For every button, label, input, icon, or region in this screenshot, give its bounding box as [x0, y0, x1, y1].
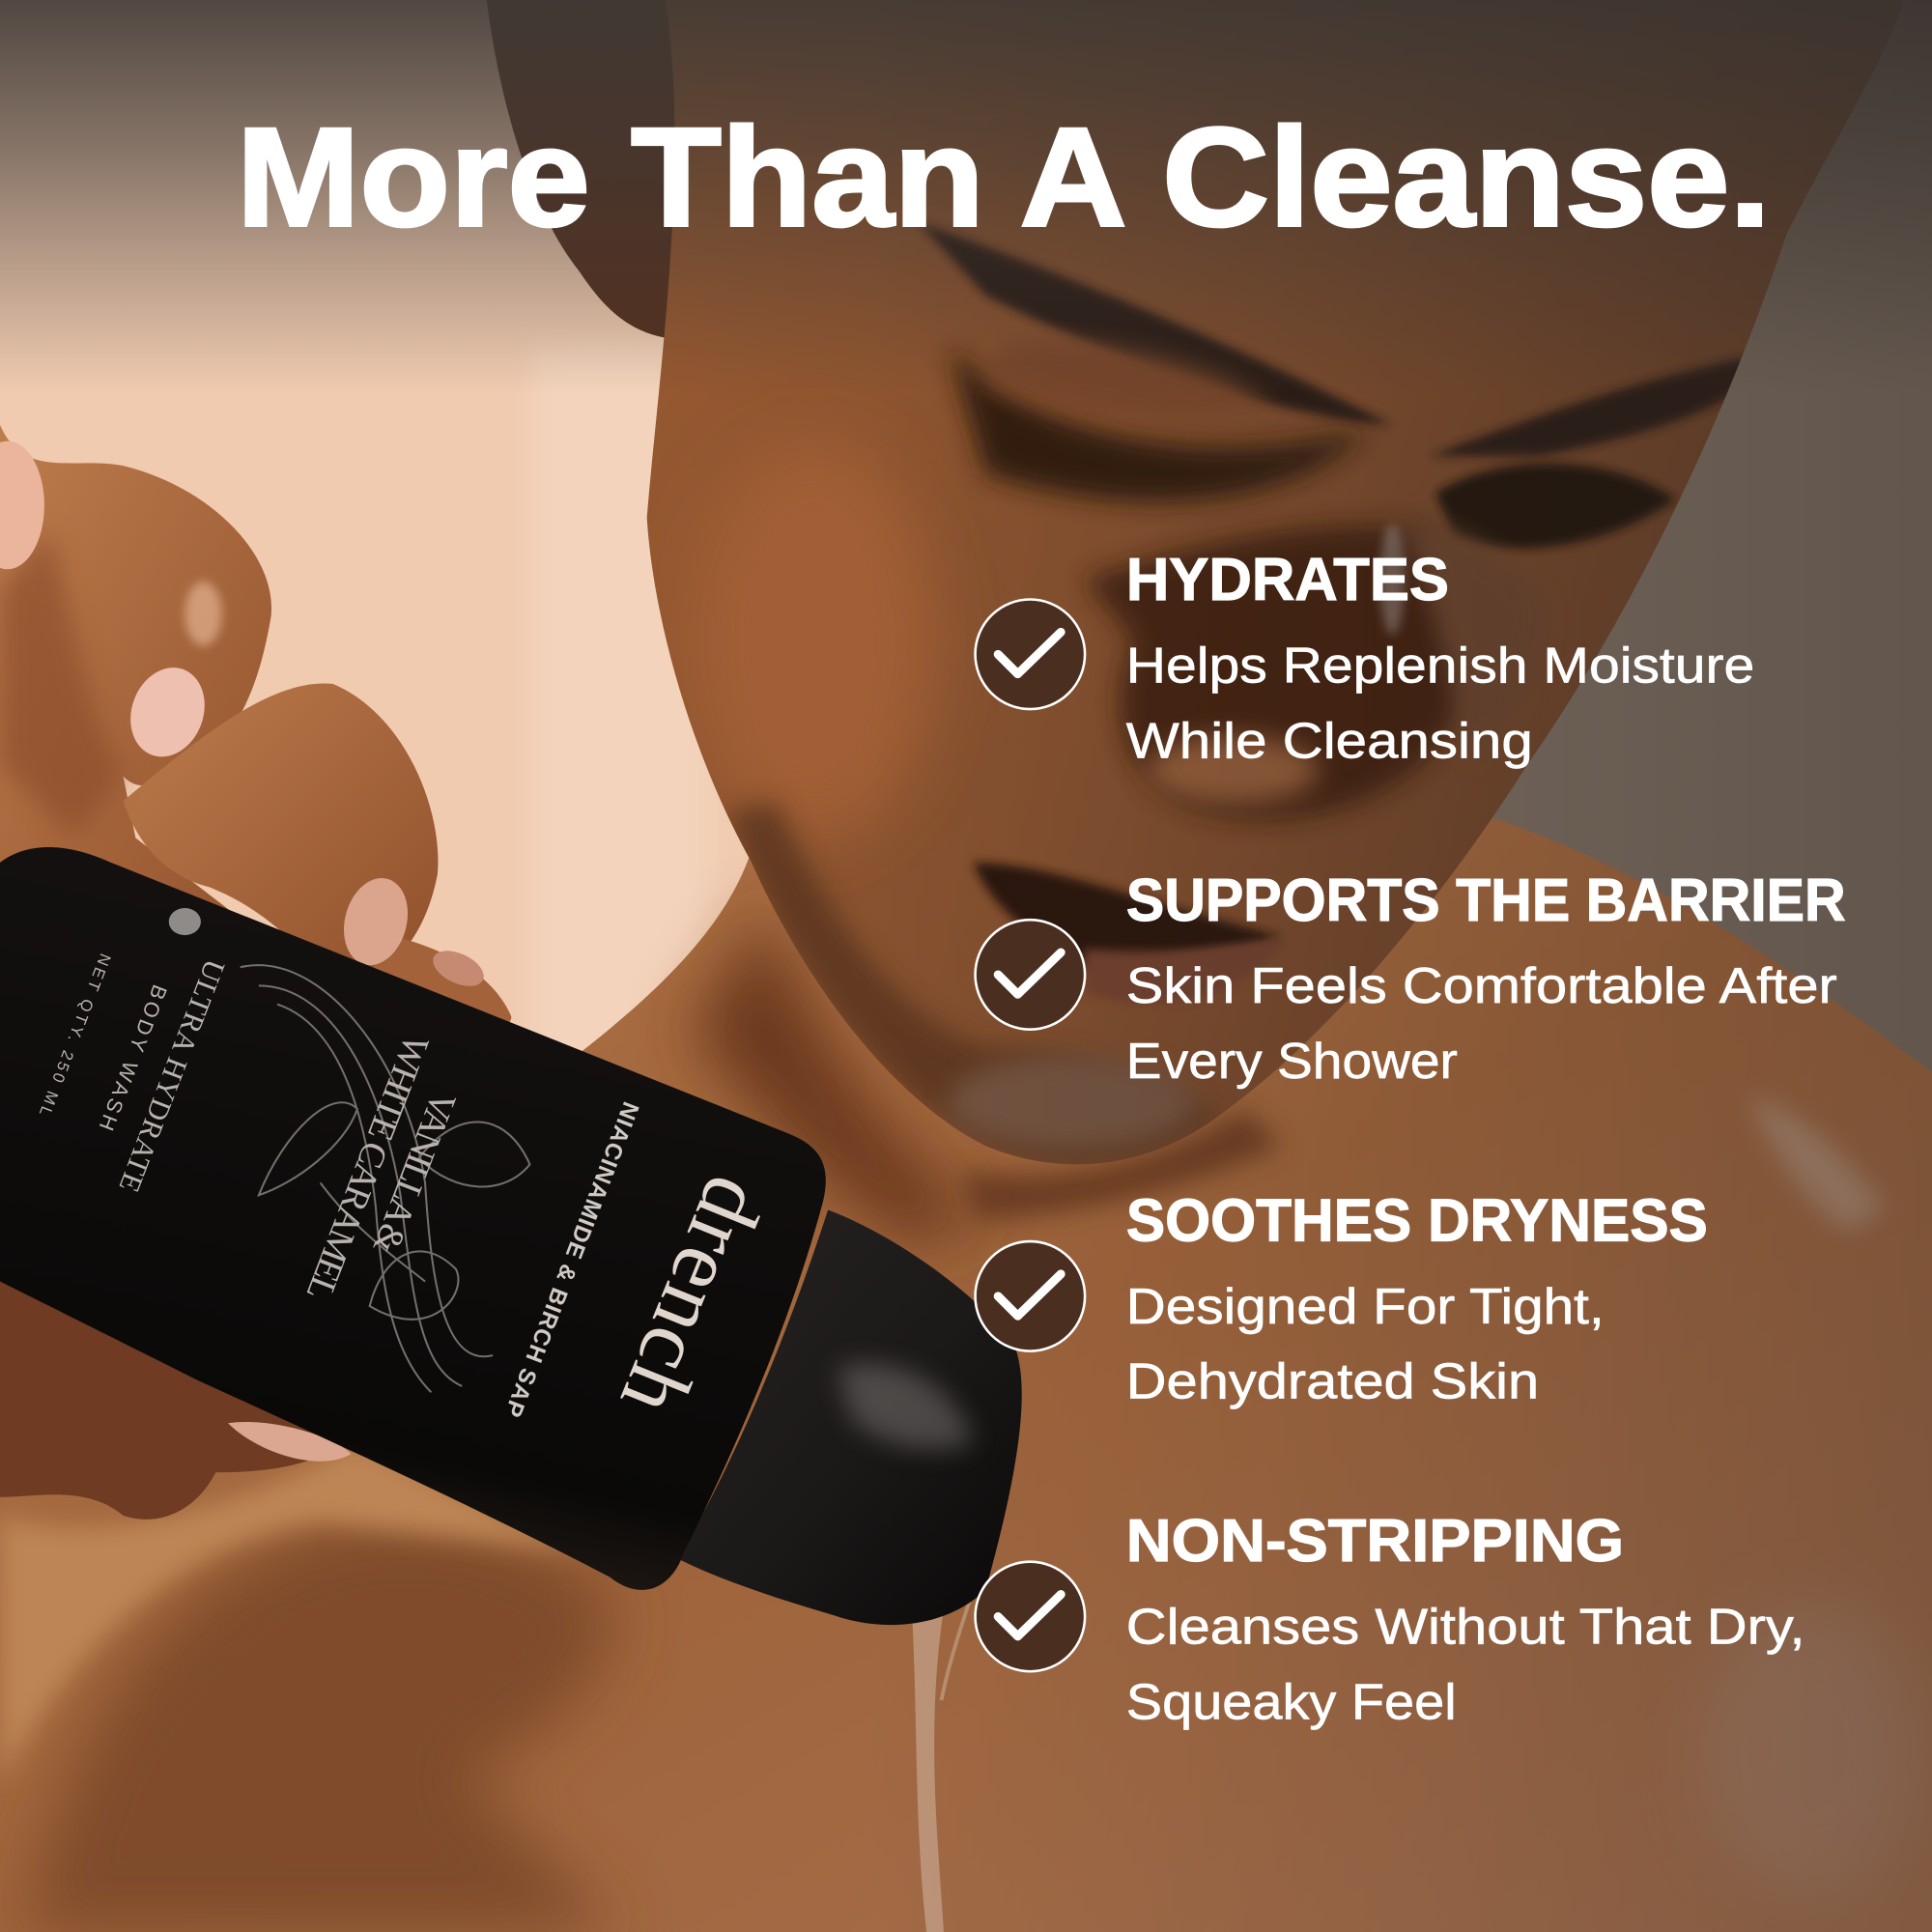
icon: check circle [976, 1241, 1085, 1351]
benefit: supports the barrier [976, 867, 1846, 1090]
description [1126, 1279, 1605, 1410]
bottle text: brand: drench [602, 1163, 785, 1429]
bottle text: ingredients: NIACINAMIDE & BIRCH SAP [499, 1098, 643, 1420]
description: Helps Replenish Moisture [1126, 639, 1754, 695]
description: Every Shower [1126, 1034, 1458, 1090]
icon: check circle [976, 600, 1085, 709]
heading: SOOTHES DRYNESS [1126, 1186, 1708, 1254]
water stream [912, 1589, 974, 1932]
description: Cleanses Without That Dry, [1126, 1600, 1805, 1656]
description: Squeaky Feel [1126, 1674, 1457, 1730]
lower hand under bottle [0, 1109, 357, 1520]
heading: SUPPORTS THE BARRIER [1126, 867, 1846, 934]
icon: check circle [976, 1562, 1085, 1671]
upper hand and fingers [0, 425, 511, 1028]
bottle text: range: ULTRA HYDRATE [112, 955, 231, 1197]
description: Dehydrated Skin [1126, 1354, 1539, 1410]
description [1126, 1600, 1805, 1730]
heading: NON-STRIPPING [1126, 1507, 1624, 1575]
description: While Cleansing [1126, 713, 1533, 769]
description [1126, 639, 1754, 769]
icon: check circle [976, 920, 1085, 1030]
bottle text: scent: VANILLA & [364, 1086, 464, 1260]
bottle text: type: BODY WASH [95, 981, 172, 1134]
benefit: non-stripping [976, 1507, 1805, 1730]
product bottle [0, 847, 1022, 1625]
man's head and face [487, 0, 1904, 1164]
description: Skin Feels Comfortable After [1126, 958, 1837, 1014]
cap highlight [838, 1364, 974, 1449]
description [1126, 958, 1837, 1090]
bottle body [0, 847, 826, 1590]
description: Designed For Tight, [1126, 1279, 1605, 1335]
heading: HYDRATES [1126, 546, 1449, 613]
benefit: soothes dryness [976, 1186, 1708, 1410]
title: More Than A Cleanse. [237, 98, 1771, 255]
bottle text: quantity: NET QTY. 250 ML [36, 952, 115, 1119]
bottle text: scent line two: WHITE CARAMEL [298, 1030, 437, 1306]
torso and shoulders [0, 813, 1932, 1932]
vanilla flower line art [241, 965, 529, 1392]
bottle cap [678, 1210, 1022, 1625]
benefit: hydrates [976, 546, 1754, 769]
